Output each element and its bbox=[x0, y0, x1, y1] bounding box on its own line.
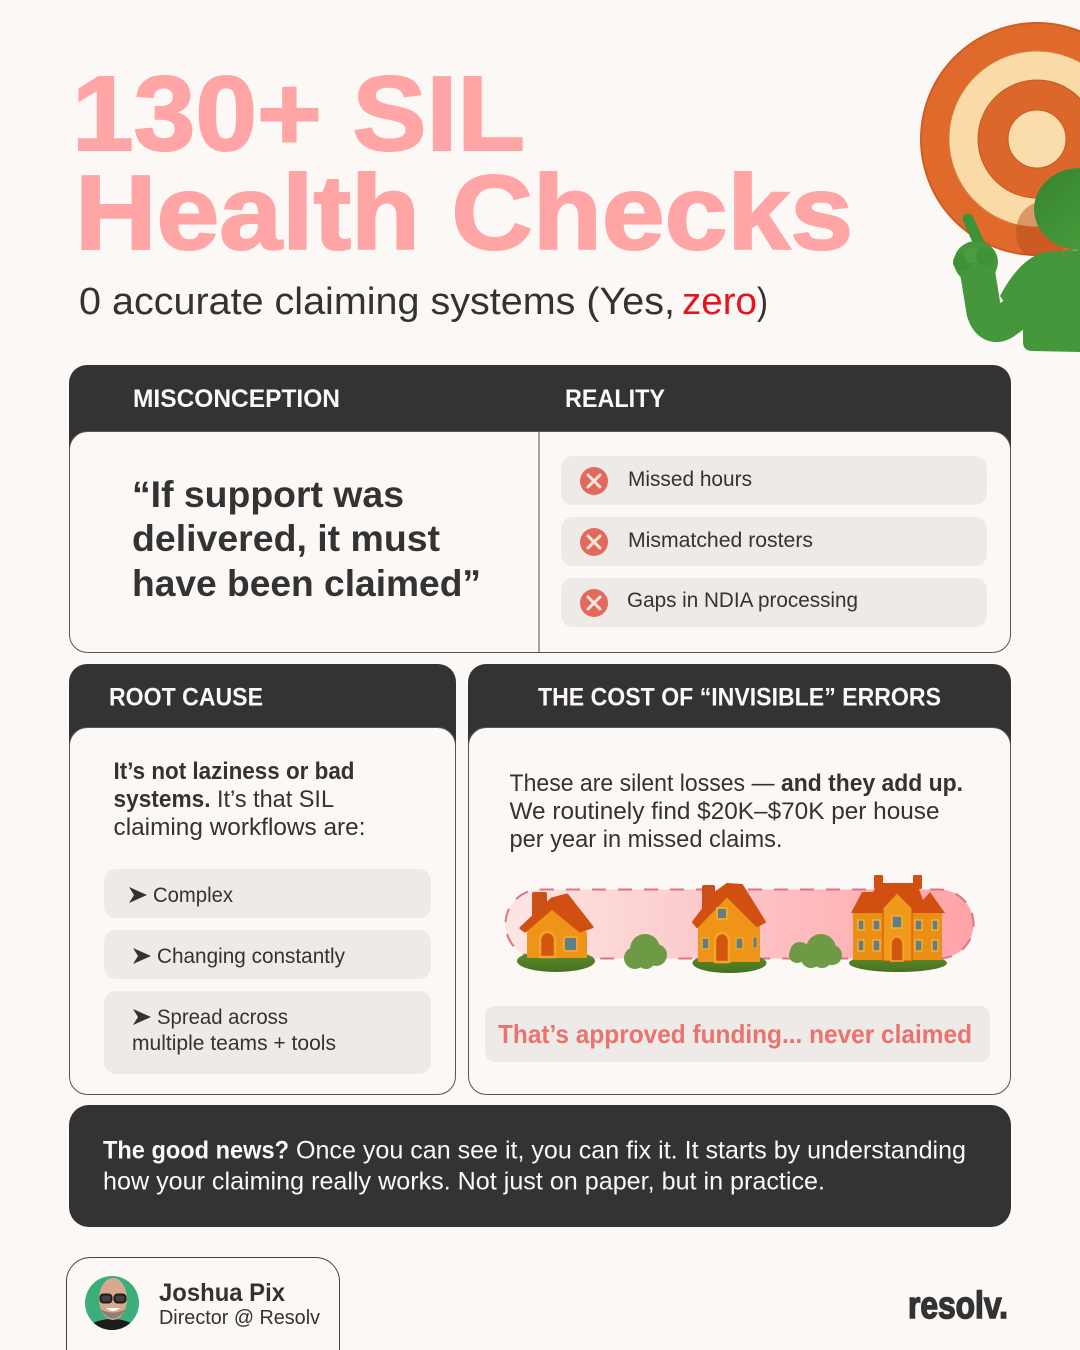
root cause text: claiming workflows are: bbox=[114, 814, 366, 841]
panel: good news: Once you can see it, you can fix it. It starts by understanding bbox=[296, 1136, 966, 1164]
root cause text: systems. bbox=[114, 786, 210, 813]
icon: double bush bbox=[789, 934, 842, 968]
reality item: gaps in NDIA processing: Gaps in NDIA processing bbox=[627, 589, 858, 612]
title: 130+ SIL bbox=[72, 55, 525, 173]
logo: resolv: resolv. bbox=[908, 1285, 1008, 1327]
item: spread across teams and tools bbox=[104, 991, 431, 1074]
title: Health Checks bbox=[75, 154, 853, 272]
subtitle: zero bbox=[682, 281, 757, 323]
reality item: gaps in NDIA processing bbox=[561, 578, 987, 627]
root cause text bbox=[114, 758, 366, 841]
reality item: missed hours: Missed hours bbox=[628, 468, 752, 491]
quote bbox=[132, 474, 481, 604]
reality item: mismatched rosters: Mismatched rosters bbox=[628, 529, 813, 552]
callout: approved funding never claimed: That’s approved funding... never claimed bbox=[498, 1019, 972, 1049]
panel: cost of invisible errors bbox=[468, 664, 1011, 1094]
panel: good news bbox=[69, 1105, 1011, 1227]
reality item: missed hours bbox=[561, 456, 987, 505]
panel: misconception vs reality bbox=[69, 365, 1011, 652]
root cause text: It’s that SIL bbox=[217, 786, 334, 813]
icon: large house bbox=[849, 875, 947, 972]
author role: Director @ Resolv bbox=[159, 1307, 320, 1329]
icon: bush bbox=[624, 934, 667, 969]
panel: good news: how your claiming really works. Not just on paper, but in practice. bbox=[103, 1168, 825, 1196]
icon: small house bbox=[517, 892, 595, 972]
title bbox=[72, 55, 853, 272]
panel: good news: The good news? bbox=[103, 1136, 289, 1164]
item: complex: Complex bbox=[153, 884, 233, 907]
quote: have been claimed” bbox=[132, 563, 481, 604]
cost text: We routinely find $20K–$70K per house bbox=[510, 798, 940, 825]
quote: delivered, it must bbox=[132, 518, 440, 559]
item: changing constantly: Changing constantly bbox=[157, 945, 345, 968]
avatar bbox=[85, 1276, 139, 1330]
panel: root cause bbox=[69, 664, 456, 1094]
author name: Joshua Pix bbox=[159, 1279, 285, 1307]
cost text bbox=[510, 770, 963, 853]
item: spread across teams and tools: Spread across bbox=[157, 1006, 288, 1029]
heading: misconception: MISCONCEPTION bbox=[133, 385, 340, 413]
subtitle: ) bbox=[757, 281, 768, 323]
root cause text: It’s not laziness or bad bbox=[114, 758, 354, 785]
icon: medium house bbox=[692, 884, 766, 973]
reality item: mismatched rosters bbox=[561, 517, 987, 566]
cost text: per year in missed claims. bbox=[510, 826, 782, 853]
item: complex bbox=[104, 869, 431, 918]
cost text: and they add up. bbox=[781, 770, 963, 797]
author card bbox=[66, 1258, 340, 1350]
callout: approved funding never claimed bbox=[485, 1006, 990, 1062]
cost text: These are silent losses — bbox=[510, 770, 774, 797]
quote: “If support was bbox=[132, 474, 404, 515]
illustration: growing houses on a dashed band bbox=[506, 875, 974, 973]
item: changing constantly bbox=[104, 930, 431, 979]
heading: cost of invisible errors: THE COST OF “INVISIBLE” ERRORS bbox=[538, 684, 941, 712]
heading: reality: REALITY bbox=[565, 385, 665, 413]
subtitle: 0 accurate claiming systems (Yes, bbox=[79, 281, 675, 323]
icon: target with pointing green figure bbox=[921, 23, 1080, 352]
item: spread across teams and tools: multiple teams + tools bbox=[132, 1032, 336, 1055]
heading: root cause: ROOT CAUSE bbox=[109, 684, 263, 712]
